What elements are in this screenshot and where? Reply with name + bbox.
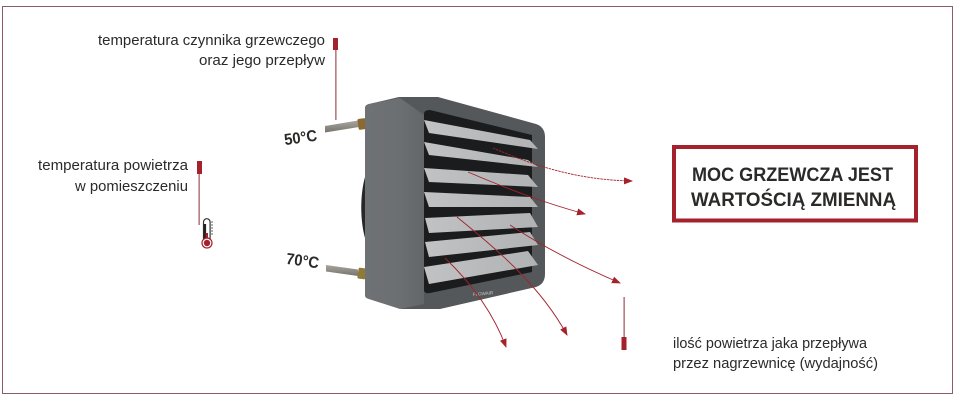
label: 50°C: 50°C xyxy=(283,128,319,149)
label: heating medium temperature and flow xyxy=(98,33,326,69)
heater side panel xyxy=(365,98,424,309)
label: heating medium temperature and flow: oraz jego przepływ xyxy=(199,53,326,69)
marker: room air temperature xyxy=(197,161,202,225)
pipe: upper connection xyxy=(325,118,367,132)
marker: air flow xyxy=(622,297,626,350)
airflow arrows xyxy=(445,148,632,347)
label: room air temperature: w pomieszczeniu xyxy=(74,179,188,195)
brand mark: FLOWAIR xyxy=(473,290,494,297)
label: heating medium temperature and flow: temperatura czynnika grzewczego xyxy=(98,33,325,49)
marker: heating medium xyxy=(333,38,338,120)
icon: thermometer xyxy=(202,219,213,248)
label: air flow volume: ilość powietrza jaka przepływa xyxy=(673,336,868,352)
pipe: lower connection xyxy=(326,265,367,279)
label: room air temperature xyxy=(38,158,189,195)
fan bulge xyxy=(361,177,365,238)
heater housing xyxy=(365,97,545,309)
callout: variable heating power xyxy=(674,147,916,220)
label: air flow volume: przez nagrzewnicę (wydajność) xyxy=(673,356,878,372)
callout: variable heating power: WARTOŚCIĄ ZMIENNĄ xyxy=(691,189,896,211)
louvers xyxy=(424,120,538,284)
label: air flow volume xyxy=(673,336,878,372)
label: 70°C: 70°C xyxy=(285,251,320,272)
label: room air temperature: temperatura powietrza xyxy=(38,158,189,174)
heater inner opening xyxy=(424,110,532,293)
heater unit xyxy=(361,97,545,309)
callout: variable heating power: MOC GRZEWCZA JEST xyxy=(692,165,893,186)
